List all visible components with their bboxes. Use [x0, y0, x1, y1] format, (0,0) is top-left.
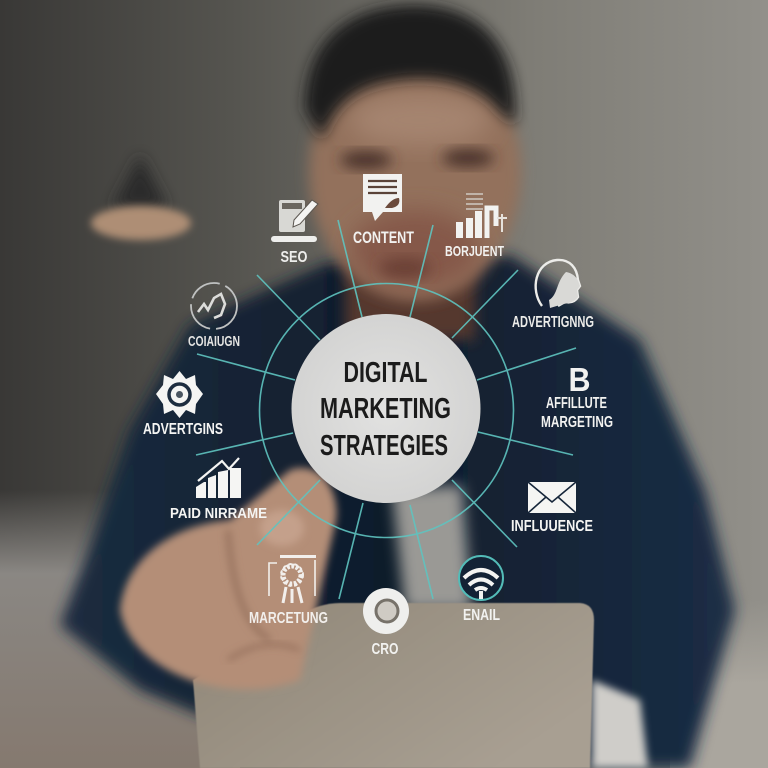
- node: advertising gear: [143, 371, 223, 438]
- outer ring: [260, 284, 514, 538]
- node: seo: SEO: [280, 249, 308, 266]
- central disc: [292, 314, 480, 503]
- jacket: [60, 255, 735, 768]
- node: paid chart: [170, 458, 267, 522]
- node: analytics: [445, 194, 507, 260]
- shirt: [392, 485, 472, 610]
- node: affiliate marketing: MARGETING: [541, 414, 613, 431]
- node: affiliate marketing: [541, 361, 613, 431]
- title: DIGITAL: [344, 357, 428, 389]
- node: influence envelope: [511, 482, 593, 535]
- title: STRATEGIES: [320, 430, 448, 462]
- node: campaign globe: [188, 283, 240, 350]
- hair: [305, 5, 515, 140]
- node: seo: [271, 200, 318, 266]
- node: marketing gear: [249, 555, 328, 627]
- neck and face: [309, 44, 521, 340]
- node: advertising gear: ADVERTGINS: [143, 421, 223, 438]
- node: email wifi: [459, 556, 503, 624]
- laptop: [193, 603, 594, 768]
- lamp: [91, 155, 191, 240]
- node: campaign globe: COIAIUGN: [188, 334, 240, 350]
- node: advertising head: ADVERTIGNNG: [512, 314, 594, 331]
- node: content: CONTENT: [353, 228, 414, 247]
- node: affiliate marketing: B: [568, 361, 590, 398]
- node: paid chart: PAID NIRRAME: [170, 505, 267, 522]
- node: analytics: BORJUENT: [445, 243, 504, 260]
- node: cro: [363, 588, 409, 658]
- sleeve: [592, 680, 648, 768]
- title: MARKETING: [320, 393, 451, 425]
- node: email wifi: ENAIL: [463, 607, 500, 624]
- node: marketing gear: MARCETUNG: [249, 610, 328, 627]
- node: content: [353, 174, 414, 247]
- node: advertising head: [512, 260, 594, 331]
- spokes: [196, 220, 576, 599]
- node: cro: CRO: [372, 641, 398, 658]
- node: influence envelope: INFLUUENCE: [511, 518, 593, 535]
- hand: [120, 468, 337, 689]
- title: [320, 357, 451, 462]
- radial diagram lines: [196, 220, 576, 599]
- node: affiliate marketing: AFFILLUTE: [546, 395, 607, 412]
